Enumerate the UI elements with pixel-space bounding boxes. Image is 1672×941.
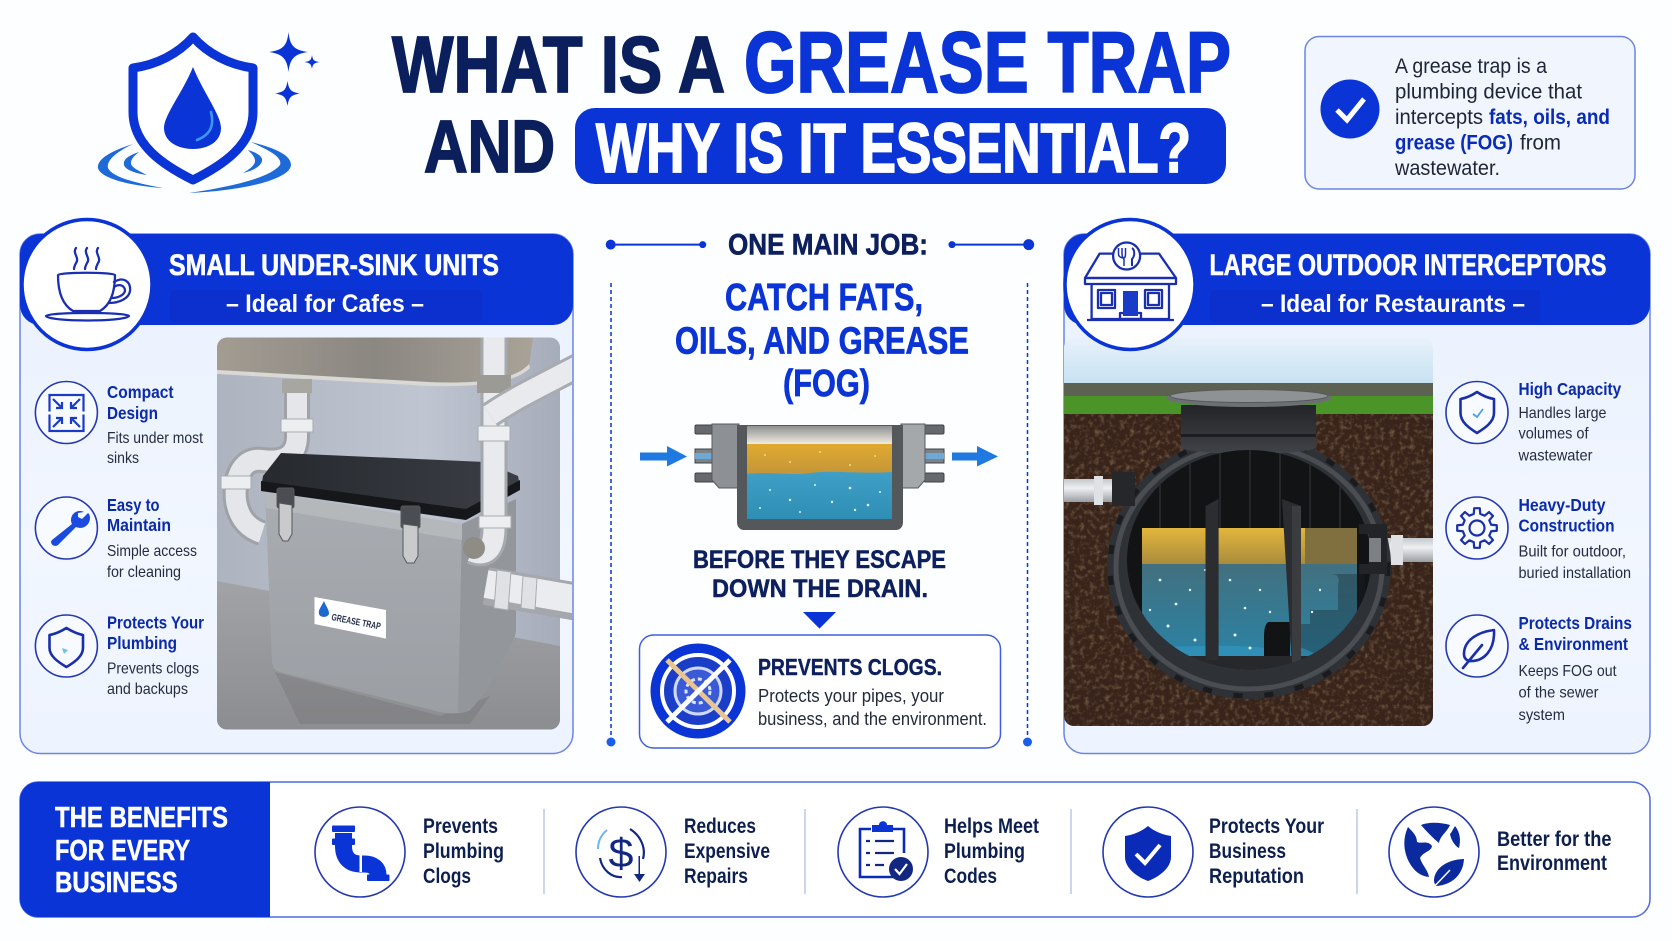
panel: large outdoor interceptors [1064, 220, 1650, 754]
icon: dollar: $ [608, 830, 634, 876]
feature: heavy-duty construction [1446, 495, 1631, 582]
benefits heading: THE BENEFITS [55, 802, 228, 834]
icon: blocked drain [650, 644, 746, 738]
benefit: helps meet plumbing codes: Helps Meet [944, 815, 1039, 838]
callout: definition: from [1520, 132, 1561, 154]
callout: definition: A grease trap is a [1395, 55, 1547, 78]
heading connectors [606, 239, 1034, 746]
tall pipe [472, 338, 494, 553]
drain pipe [236, 385, 297, 533]
panel header: SMALL UNDER-SINK UNITS [169, 249, 499, 282]
feature: protects drains and environment: & Environment [1518, 634, 1628, 654]
benefit: protects your business reputation: Reputation [1209, 865, 1304, 888]
main statement: CATCH FATS, [725, 277, 923, 319]
heading: ONE MAIN JOB: [728, 229, 928, 262]
inner chamber [1127, 450, 1371, 670]
callout: definition: grease (FOG) [1395, 132, 1513, 154]
benefit: helps meet plumbing codes: Codes [944, 865, 997, 888]
callout: prevents clogs: PREVENTS CLOGS. [758, 654, 942, 680]
benefits heading: FOR EVERY [55, 835, 190, 867]
feature: high capacity: Handles large [1518, 405, 1607, 422]
logo: shield with water drop [98, 32, 320, 193]
icon: shield check [1460, 392, 1494, 433]
text: before they escape: DOWN THE DRAIN. [712, 575, 928, 603]
feature: protects drains and environment: of the sewer [1518, 684, 1599, 702]
neck [1181, 405, 1316, 454]
benefit: better for the environment: Environment [1497, 852, 1607, 875]
branch and outlet pipes [486, 360, 590, 610]
panel header [20, 234, 573, 325]
benefit: reduces expensive repairs: Reduces [684, 815, 756, 838]
feature: protects drains and environment: Protects Drains [1518, 613, 1632, 633]
feature: protects drains and environment: Keeps FOG out [1518, 663, 1617, 680]
title pill: WHY IS IT ESSENTIAL? [596, 109, 1191, 187]
panel header: – Ideal for Restaurants – [1261, 290, 1525, 318]
callout: definition: wastewater. [1394, 157, 1500, 180]
feature: protects your plumbing [35, 613, 204, 698]
benefit: reduces expensive repairs [576, 807, 770, 897]
benefit: protects your business reputation [1103, 807, 1324, 897]
feature: compact design: Design [107, 403, 158, 423]
sparkles [269, 32, 308, 72]
feature: high capacity: High Capacity [1518, 379, 1621, 399]
trap lid [262, 453, 519, 509]
benefit: helps meet plumbing codes: Plumbing [944, 840, 1025, 863]
feature: heavy-duty construction: buried installation [1518, 565, 1631, 582]
benefits heading [20, 782, 270, 917]
callout: definition: fats, oils, and [1489, 106, 1610, 129]
text: before they escape [693, 546, 946, 603]
benefit: helps meet plumbing codes [838, 807, 1039, 897]
title: AND [424, 105, 555, 188]
benefit: prevents plumbing clogs: Clogs [423, 865, 471, 888]
callout: prevents clogs [640, 635, 1000, 748]
benefit: protects your business reputation: Business [1209, 840, 1286, 863]
icon: leaf [1463, 630, 1494, 668]
icon: check [1320, 80, 1380, 138]
arrow: flow out [952, 446, 998, 466]
icon: shield [50, 628, 83, 667]
tank shell [1107, 435, 1391, 699]
feature: compact design: Fits under most [107, 430, 203, 447]
arrow: down triangle [803, 612, 836, 629]
photo: buried interceptor [1064, 338, 1433, 726]
benefit: prevents plumbing clogs: Prevents [423, 815, 498, 838]
title: WHAT IS A [392, 20, 725, 109]
latches [277, 488, 420, 563]
pipes [1064, 479, 1112, 502]
feature: high capacity: wastewater [1518, 448, 1593, 465]
callout: definition: plumbing device that [1395, 80, 1582, 104]
benefit: protects your business reputation: Protects Your [1209, 815, 1324, 838]
feature: heavy-duty construction: Construction [1518, 515, 1614, 535]
feature: protects your plumbing: Plumbing [107, 633, 177, 653]
benefits heading: BUSINESS [55, 867, 178, 899]
benefit: reduces expensive repairs: Expensive [684, 840, 770, 863]
icon: clipboard [860, 821, 913, 881]
main statement: (FOG) [783, 363, 870, 405]
feature: heavy-duty construction: Built for outdoor, [1518, 543, 1626, 560]
trap label: GREASE TRAP [330, 612, 382, 633]
benefit: better for the environment [1389, 807, 1612, 897]
callout: definition: intercepts [1395, 106, 1483, 129]
arrow: flow in [640, 446, 687, 466]
main statement: OILS, AND GREASE [675, 321, 969, 363]
feature: easy to maintain: Maintain [107, 515, 171, 535]
feature: high capacity: volumes of [1518, 426, 1589, 443]
feature: compact design [35, 382, 203, 467]
feature: easy to maintain [35, 495, 197, 581]
feature: high capacity [1446, 379, 1621, 465]
icon: gear [1457, 508, 1497, 548]
feature: easy to maintain: Easy to [107, 495, 160, 515]
panel header: – Ideal for Cafes – [226, 290, 424, 318]
icon: coffee cup [22, 220, 152, 350]
feature: compact design: sinks [107, 450, 139, 467]
main statement [675, 277, 969, 405]
feature: protects your plumbing: Prevents clogs [107, 661, 199, 678]
panel: benefits bar [20, 782, 1650, 917]
feature: easy to maintain: Simple access [107, 543, 197, 560]
feature: heavy-duty construction: Heavy-Duty [1518, 495, 1606, 515]
benefit: prevents plumbing clogs [315, 807, 504, 897]
panel: small under-sink units [20, 220, 590, 754]
feature: protects your plumbing: Protects Your [107, 613, 204, 633]
icon: wrench [51, 511, 90, 546]
icon: pipe [332, 826, 390, 881]
baffles [1206, 499, 1219, 660]
trap label [314, 597, 386, 639]
callout: prevents clogs: Protects your pipes, your [758, 685, 944, 706]
callout: definition [1305, 36, 1635, 189]
title [392, 15, 1231, 188]
feature: compact design: Compact [107, 382, 174, 402]
trap body [266, 504, 462, 714]
diagram: trap cross-section [695, 424, 944, 530]
icon: globe and leaf [1404, 823, 1464, 886]
drop [164, 67, 221, 149]
feature: easy to maintain: for cleaning [107, 564, 181, 581]
title: GREASE TRAP [744, 15, 1231, 111]
benefit: reduces expensive repairs: Repairs [684, 865, 748, 888]
feature: protects your plumbing: and backups [107, 681, 188, 698]
icon: restaurant [1065, 220, 1195, 350]
callout: prevents clogs: business, and the environment. [758, 708, 987, 729]
feature: protects drains and environment: system [1518, 707, 1565, 724]
text: before they escape: BEFORE THEY ESCAPE [693, 546, 946, 574]
manhole cover [1166, 389, 1332, 407]
icon: dollar [598, 829, 645, 882]
panel: one main job [606, 229, 1034, 748]
icon: shield check [1125, 826, 1171, 881]
benefit: prevents plumbing clogs: Plumbing [423, 840, 504, 863]
ports [1112, 472, 1135, 506]
feature: protects drains and environment [1446, 613, 1632, 724]
panel header [1064, 234, 1650, 325]
ripples [98, 142, 291, 193]
shield [133, 37, 253, 180]
photo: under-sink grease trap [217, 338, 590, 730]
icon: compress arrows [46, 395, 87, 431]
benefit: better for the environment: Better for the [1497, 828, 1612, 851]
